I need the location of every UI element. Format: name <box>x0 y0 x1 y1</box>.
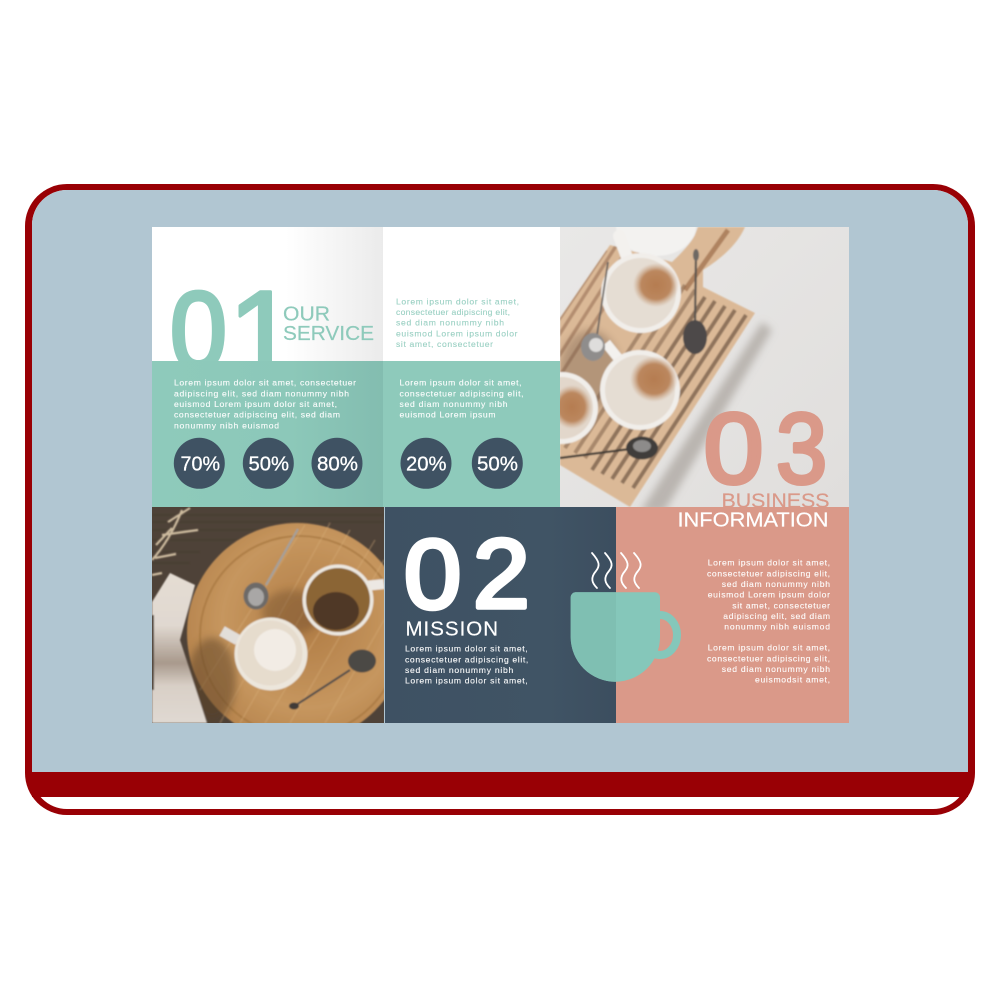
stat circle 50% second <box>472 438 523 489</box>
spoons <box>695 254 696 325</box>
digit three: 3 <box>776 393 827 505</box>
heading: information: INFORMATION <box>678 509 828 532</box>
heading: our service <box>283 302 374 345</box>
text block: information: sit amet, consectetuer <box>732 600 830 610</box>
wheat <box>152 508 198 575</box>
text block: information: euismodsit amet, <box>755 675 830 685</box>
text block: information <box>707 558 830 685</box>
number 02: 2 <box>473 519 530 629</box>
panel: information salmon <box>616 507 849 723</box>
text block: mission: consectetuer adipiscing elit, <box>405 654 528 664</box>
stat circle 50% <box>243 438 294 489</box>
icon: steam <box>592 553 641 588</box>
stat circle 80%: 80% <box>317 452 358 476</box>
spoons <box>266 529 298 585</box>
heading: our service: OUR <box>283 302 330 326</box>
text block: teal right: consectetuer adipiscing elit, <box>400 388 524 398</box>
heading: our service: SERVICE <box>283 322 374 345</box>
stat circle 50% second: 50% <box>477 452 518 476</box>
text block: top middle: consectetuer adipiscing elit, <box>396 307 510 317</box>
text block: information: consectetuer adipiscing elit, <box>707 653 830 663</box>
text block: top middle: sed diam nonummy nibh <box>396 318 504 328</box>
text block: top middle: sit amet, consectetuer <box>396 339 493 349</box>
text block: teal right: euismod Lorem ipsum <box>400 410 496 420</box>
cups <box>619 236 628 260</box>
latte <box>222 631 238 640</box>
number 03: 0 <box>704 394 764 505</box>
text block: information: consectetuer adipiscing elit, <box>707 568 830 578</box>
digit one: 1 <box>228 266 298 405</box>
text block: information: sed diam nonummy nibh <box>722 579 830 589</box>
icon: coffee cup <box>571 592 677 682</box>
text block: mission: Lorem ipsum dolor sit amet, <box>405 676 528 686</box>
stat circle 20% <box>400 438 452 489</box>
stat circle 80% <box>312 438 362 489</box>
text block: teal left: consectetuer adipiscing elit, sed diam <box>174 410 340 420</box>
panel: teal stats <box>152 361 560 507</box>
panel: our service top left <box>152 227 383 393</box>
text block: information: adipiscing elit, sed diam <box>723 611 830 621</box>
number 02 <box>404 519 530 629</box>
photo: cups on round tray <box>152 507 384 723</box>
text block: teal left: Lorem ipsum dolor sit amet, consectetuer <box>174 378 356 388</box>
device frame <box>25 184 975 815</box>
text block: mission: Lorem ipsum dolor sit amet, <box>405 644 528 654</box>
text block: teal left: adipiscing elit, sed diam nonummy nibh <box>174 388 349 398</box>
text block: mission: sed diam nonummy nibh <box>405 665 514 675</box>
text block: information: Lorem ipsum dolor sit amet, <box>708 643 830 653</box>
photo: coffee on striped board <box>560 227 849 507</box>
text block: teal left: euismod Lorem ipsum dolor sit amet, <box>174 399 337 409</box>
frame bottom band <box>32 772 968 797</box>
napkin <box>152 573 207 723</box>
heading: business: BUSINESS <box>722 490 830 512</box>
number 01: 0 <box>170 270 227 393</box>
heading: mission: MISSION <box>406 618 498 641</box>
text block: teal right <box>400 378 524 420</box>
text block: teal right: Lorem ipsum dolor sit amet, <box>400 378 522 388</box>
stat circle 70%: 70% <box>180 452 220 476</box>
stat circle 50%: 50% <box>248 452 289 476</box>
espresso <box>365 584 384 586</box>
text block: information: sed diam nonummy nibh <box>722 664 830 674</box>
text block: teal right: sed diam nonummy nibh <box>400 399 508 409</box>
text block: teal left: nonummy nibh euismod <box>174 420 279 430</box>
text block: top middle <box>396 296 519 349</box>
text block: information: nonummy nibh euismod <box>724 622 830 632</box>
text block: top middle: euismod Lorem ipsum dolor <box>396 328 518 338</box>
stat circle 20%: 20% <box>406 452 446 476</box>
panel: top middle white <box>383 227 560 361</box>
number 02: 0 <box>404 520 461 629</box>
text block: mission <box>405 644 528 686</box>
text block: information: euismod Lorem ipsum dolor <box>708 590 830 600</box>
stat circle 70% <box>174 438 225 489</box>
screen background <box>32 190 968 772</box>
text block: teal left <box>174 378 356 430</box>
panel: mission dark <box>385 507 616 723</box>
text block: information: Lorem ipsum dolor sit amet, <box>708 558 830 568</box>
text block: top middle: Lorem ipsum dolor sit amet, <box>396 296 519 306</box>
